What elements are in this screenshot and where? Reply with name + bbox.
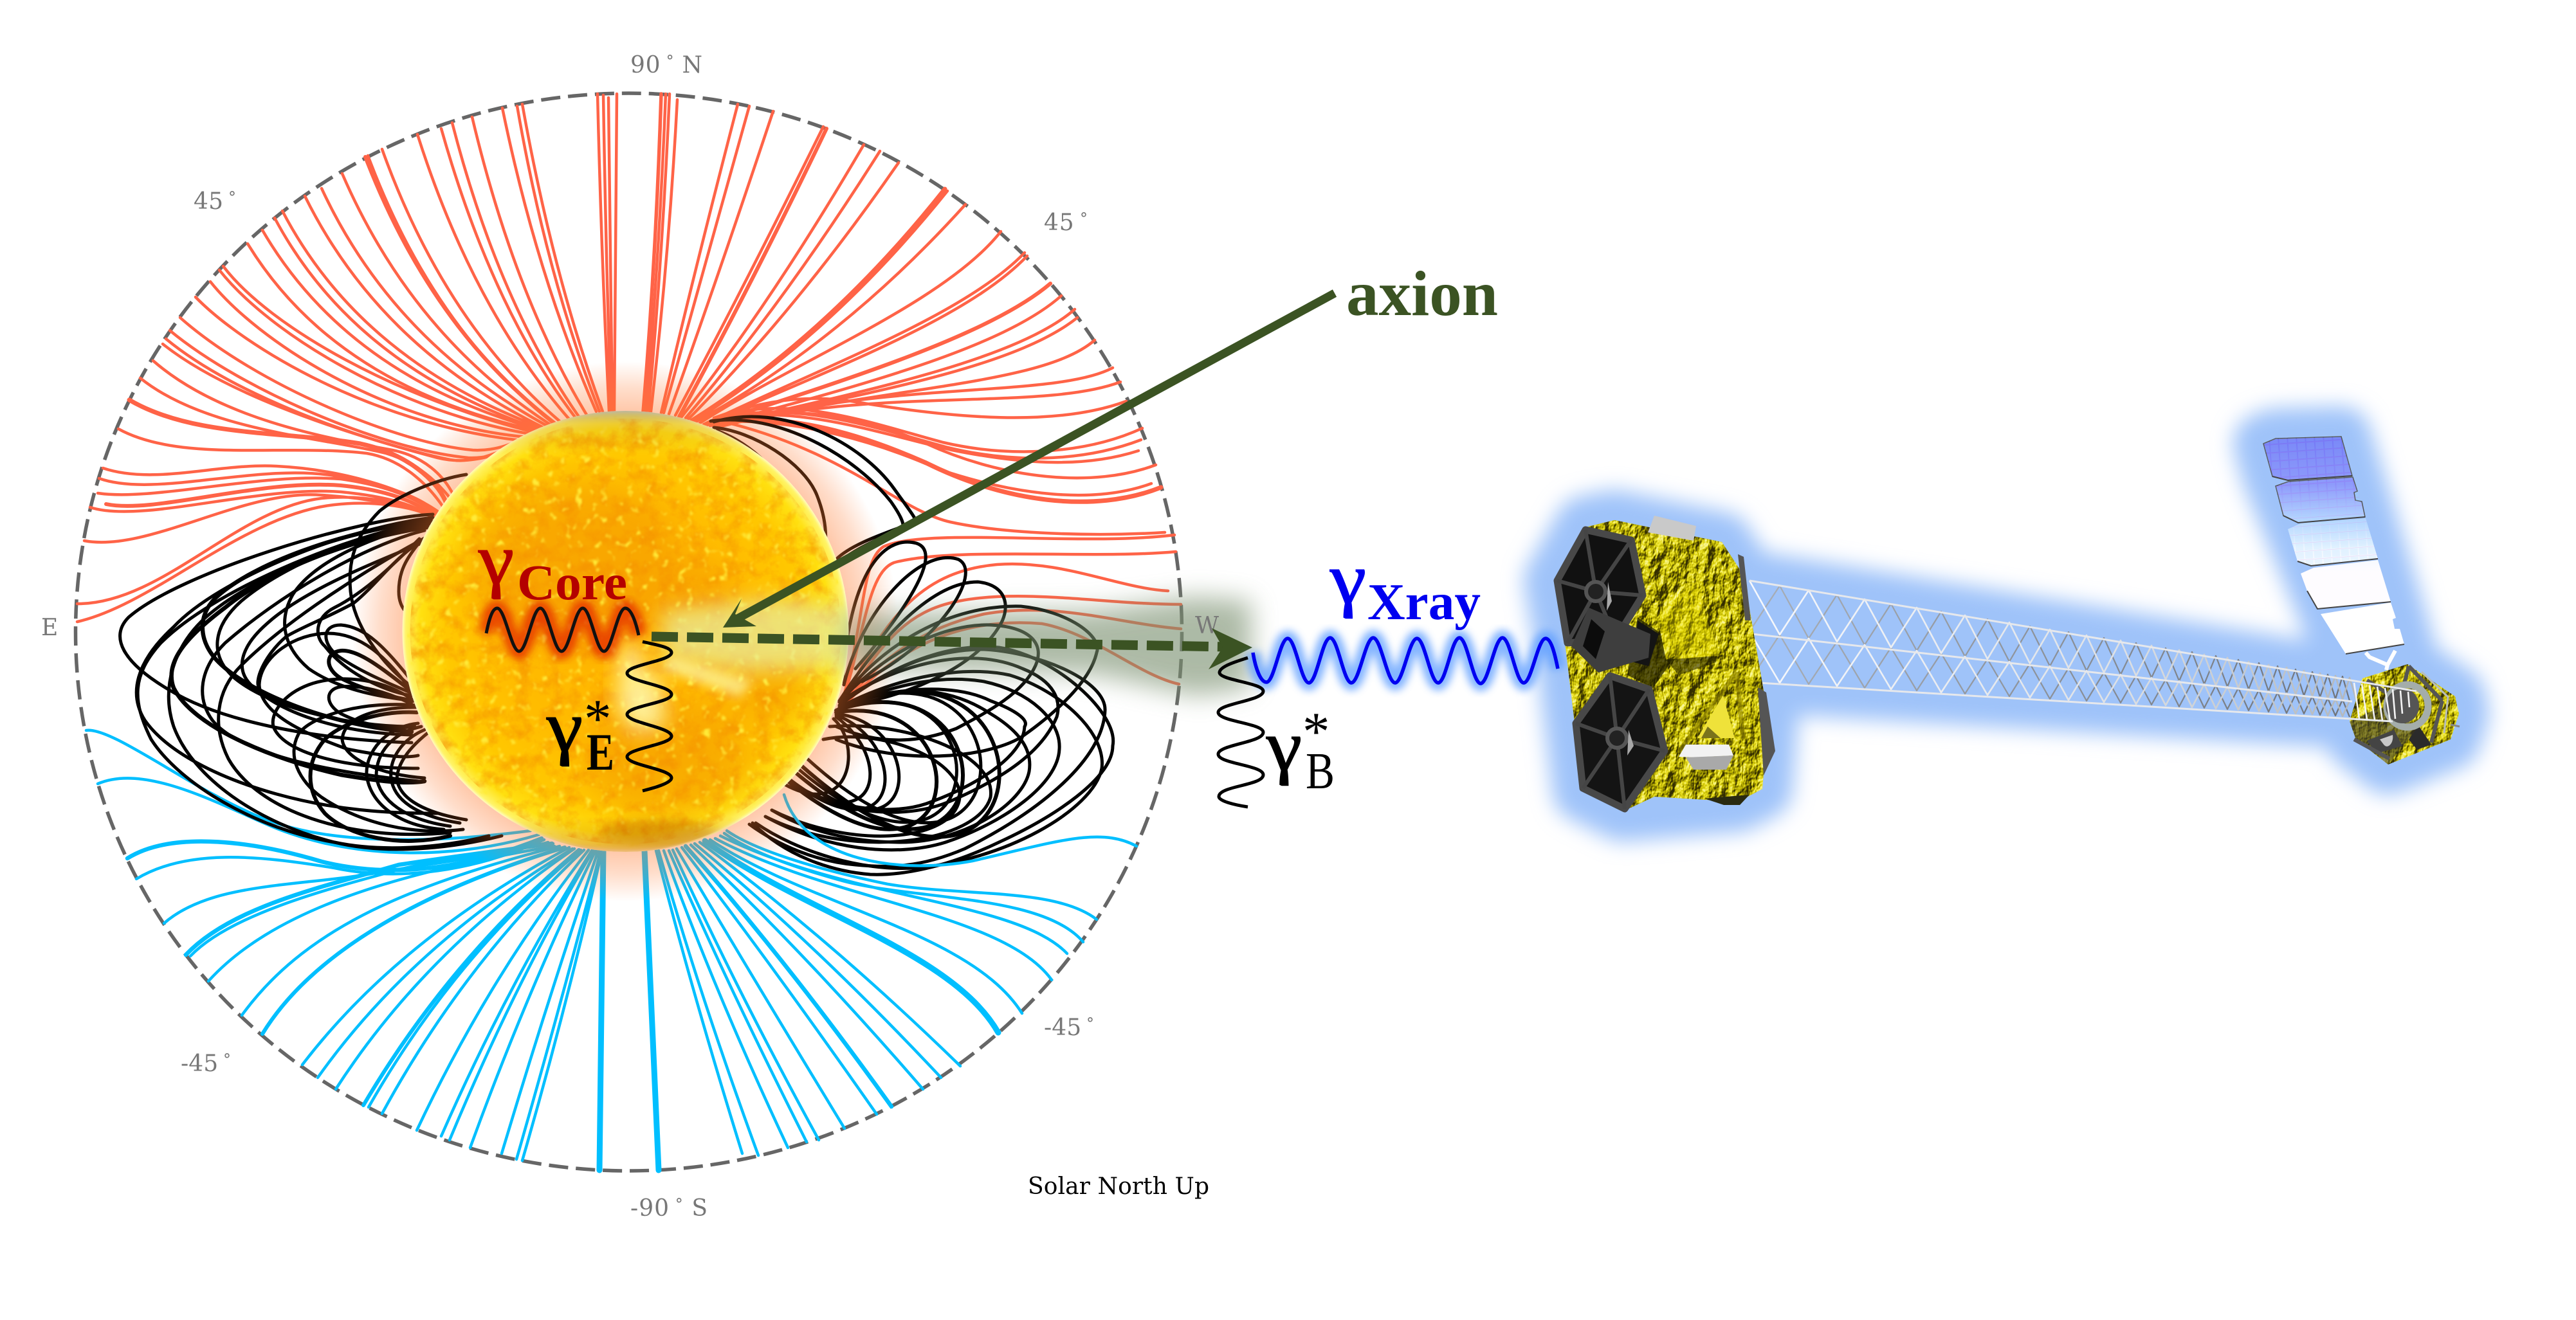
gamma core label: γ (478, 520, 514, 600)
core photon wave (486, 608, 639, 651)
tick labels around the boundary: 90 (630, 52, 661, 78)
right side grey brackets (1738, 554, 1775, 775)
large orange regions of the Sun (470, 482, 807, 817)
Sun disk (403, 411, 862, 852)
shadow beside box (1627, 617, 1676, 688)
bright rays below the wave (617, 643, 666, 733)
telescope ring on detector bench (2386, 685, 2428, 727)
upper mirror hexagon (1557, 530, 1643, 643)
tick labels around the boundary: ° (223, 188, 236, 206)
tick labels around the boundary: -45 (1044, 1015, 1081, 1041)
tick labels around the boundary: ° (1075, 210, 1088, 228)
mast end hatching over the ring (2354, 683, 2409, 721)
detector bench (2350, 664, 2460, 764)
shadow beneath the foil panel (1666, 656, 1717, 675)
electric virtual photon wave (627, 642, 671, 791)
tick labels around the boundary: ° (1081, 1015, 1094, 1033)
tick labels around the boundary: 45 (1044, 210, 1074, 236)
optics bench (1554, 516, 1775, 811)
orange glow around the Sun (352, 361, 899, 901)
green axion beam glow (849, 597, 1251, 696)
lower white instrument box (1679, 745, 1733, 770)
gamma core label: Core (517, 554, 627, 610)
tick labels around the boundary (41, 52, 1219, 1222)
gamma star E label: γ (546, 687, 583, 767)
tick labels around the boundary: E (41, 615, 58, 641)
box-shaped baffle in front of the mirrors (1571, 608, 1659, 673)
tick labels around the boundary: 45 (194, 188, 223, 215)
tick labels around the boundary: S (684, 1195, 708, 1222)
gamma star E label: E (587, 723, 614, 781)
tick labels around the boundary: -45 (181, 1051, 218, 1077)
tick labels around the boundary: ° (670, 1195, 683, 1213)
gamma star B label: * (1302, 701, 1330, 762)
tick labels around the boundary: -90 (630, 1195, 669, 1222)
pale bright region along the beam (662, 598, 862, 672)
brown patch at the lower limb (601, 820, 717, 846)
gamma star B label (1266, 701, 1335, 800)
gamma star B label: γ (1266, 707, 1302, 786)
bench dark base (1704, 795, 1749, 805)
gamma x-ray label: γ (1329, 539, 1366, 619)
tick labels around the boundary: N (674, 52, 702, 78)
lower mirror hexagon (1576, 676, 1665, 809)
triangular opening (1697, 695, 1735, 738)
array support arm (2366, 651, 2395, 670)
tick labels around the boundary: ° (661, 52, 674, 70)
axion label: axion (1346, 258, 1498, 329)
black closed field loops, left lobe (120, 475, 502, 849)
x-ray photon wave (1253, 638, 1558, 683)
gamma x-ray label: Xray (1367, 574, 1481, 631)
tick labels around the boundary: W (1195, 613, 1219, 639)
gamma star B label: B (1306, 743, 1335, 800)
red northern open field lines (77, 94, 1181, 707)
blue southern open field lines (86, 730, 1097, 1170)
gamma x-ray label (1329, 539, 1481, 631)
solar array (2263, 437, 2404, 670)
solar north up caption: Solar North Up (1028, 1173, 1209, 1200)
gamma star E label: * (584, 689, 611, 749)
upper white instrument box (1648, 516, 1696, 541)
blue glow of x-ray photon wave (1253, 638, 1558, 683)
magnetic virtual photon wave (1218, 658, 1263, 807)
tick labels around the boundary: ° (218, 1051, 231, 1069)
raised foil panel (1659, 582, 1717, 660)
red glow around core photon wave (486, 608, 639, 651)
gamma core label (478, 520, 627, 610)
deployable mast lattice (1738, 581, 2416, 721)
dashed axion path through the Sun (652, 628, 1252, 669)
foil strut around the opening (1679, 672, 1743, 752)
spacecraft blue glow (1554, 437, 2459, 811)
black closed field loops, right lobe (711, 417, 1113, 874)
blue field line crossing the right lobe (784, 795, 1137, 865)
gamma star E label (546, 687, 614, 781)
axion arrow pointing to the Sun (723, 293, 1335, 628)
dashed boundary circle of the solar field plot (76, 93, 1182, 1171)
